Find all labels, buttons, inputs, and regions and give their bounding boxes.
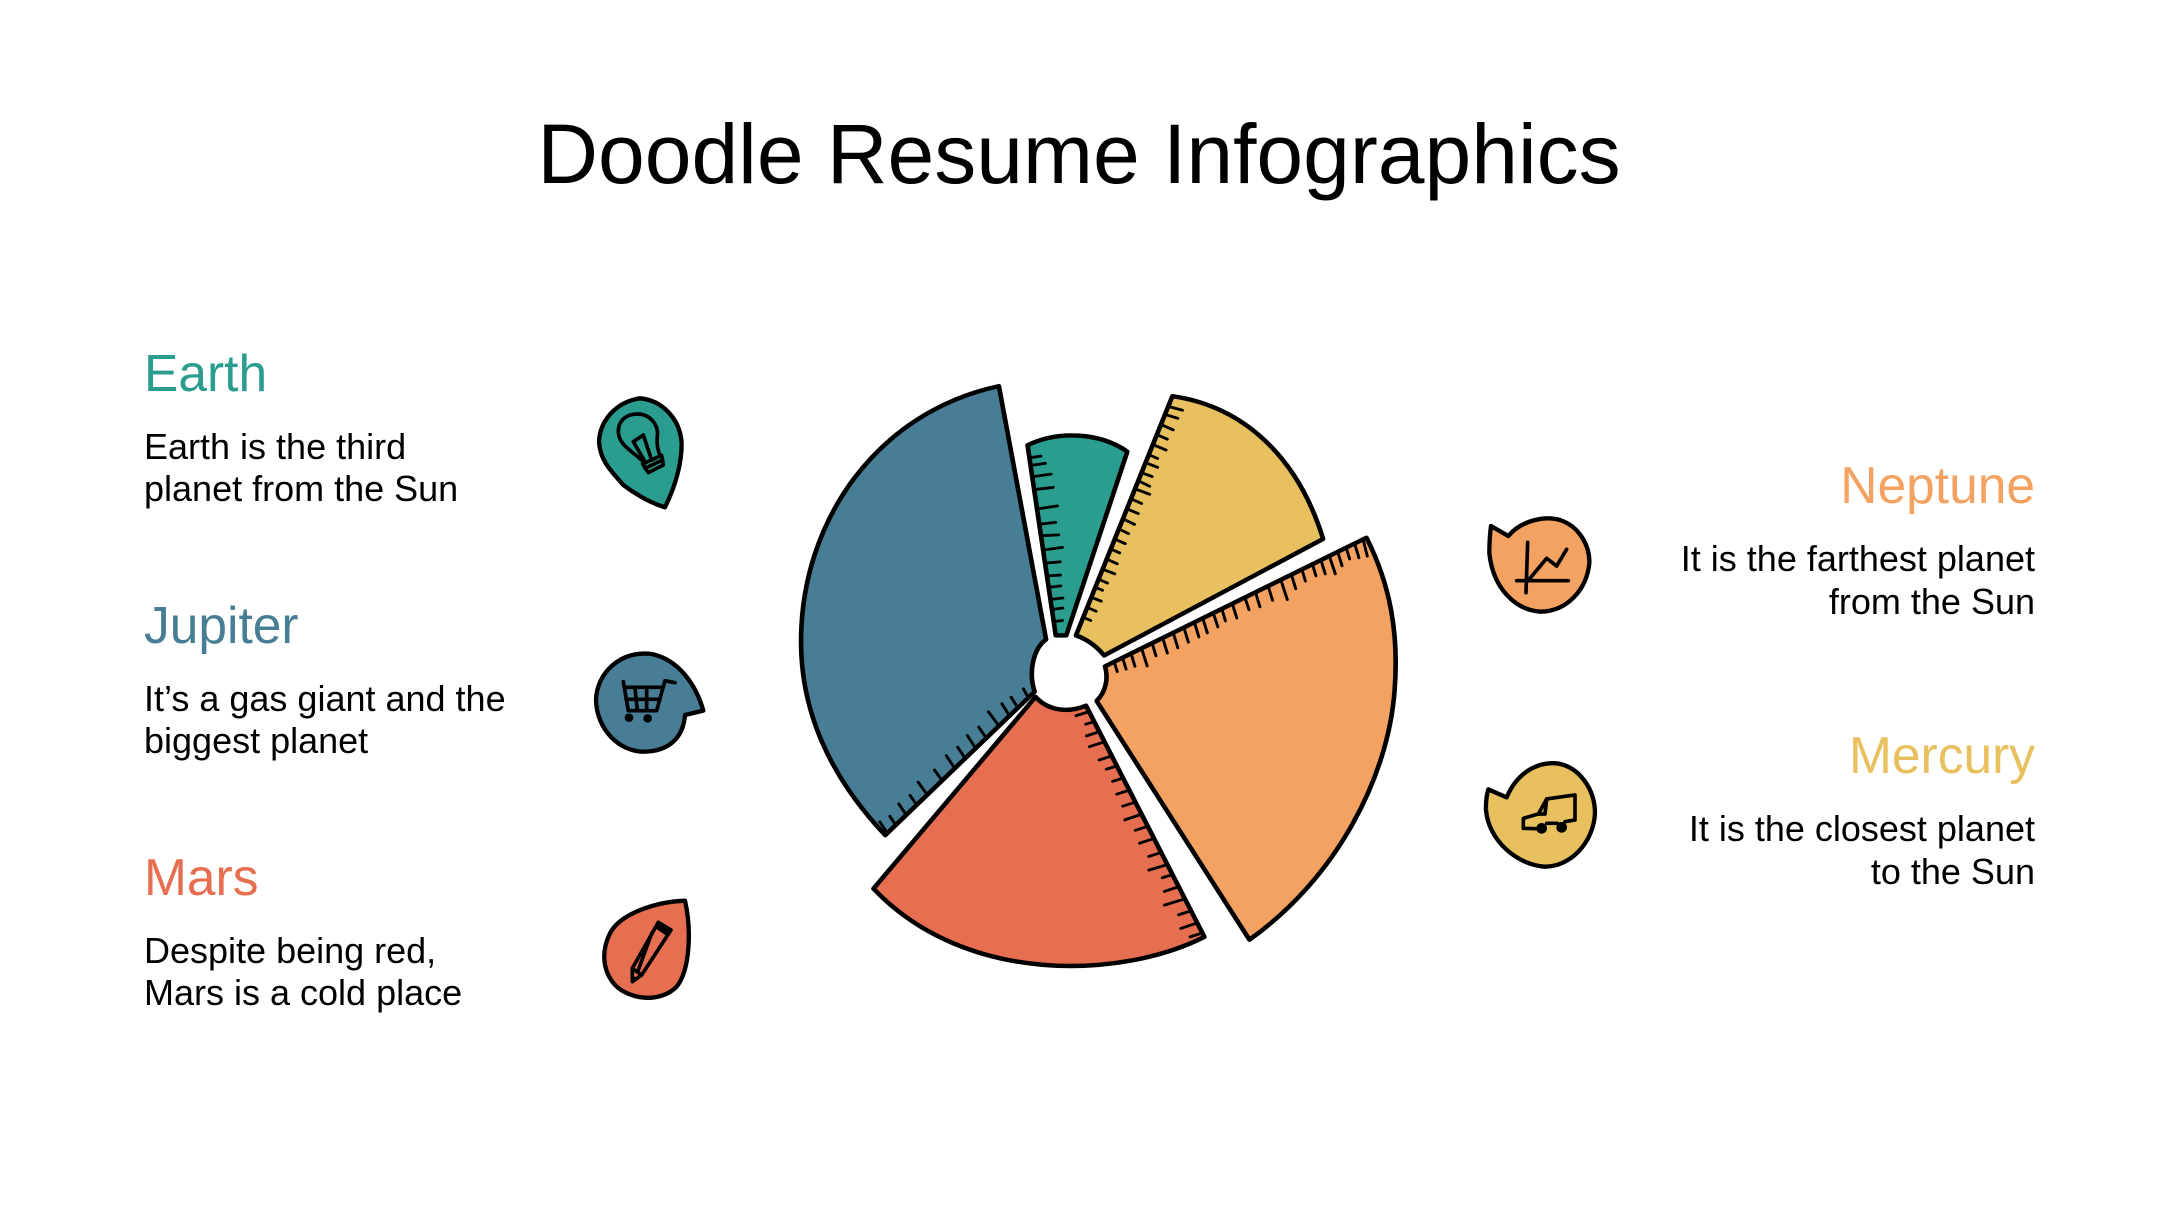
text block: Neptune: Neptune (1840, 456, 2035, 514)
slice: Neptune orange (1097, 538, 1396, 940)
text block: Neptune (1681, 456, 2035, 622)
text block: Mercury: to the Sun (1871, 851, 2035, 892)
text block: Jupiter: biggest planet (144, 720, 368, 761)
text block: Mars (144, 848, 462, 1013)
text block: Earth: planet from the Sun (144, 468, 458, 509)
title: Doodle Resume Infographics (537, 107, 1621, 201)
icon: shopping cart (596, 654, 703, 752)
text block: Earth: Earth is the third (144, 426, 406, 467)
text block: Mercury: It is the closest planet (1689, 808, 2035, 849)
text block: Mercury (1689, 726, 2035, 892)
icon: line chart (1489, 518, 1589, 612)
text block: Jupiter (144, 596, 506, 761)
icon: pencil (604, 901, 689, 998)
icon: car (1486, 763, 1595, 867)
slice: Earth teal (1028, 435, 1127, 635)
text block: Mars: Mars (144, 848, 258, 906)
text block: Earth: Earth (144, 344, 267, 402)
text block: Mars: Despite being red, (144, 930, 436, 971)
text block: Jupiter: Jupiter (144, 596, 299, 654)
text block: Mars: Mars is a cold place (144, 972, 462, 1013)
text block: Neptune: It is the farthest planet (1681, 538, 2035, 579)
slice: Mercury yellow (1076, 396, 1323, 655)
text block: Mercury: Mercury (1849, 726, 2035, 784)
pie chart (801, 386, 1396, 966)
text block: Neptune: from the Sun (1829, 581, 2035, 622)
text block: Jupiter: It’s a gas giant and the (144, 678, 506, 719)
slice: Mars red (873, 697, 1204, 966)
text block: Earth (144, 344, 458, 509)
slice: Jupiter blue (801, 386, 1046, 835)
icon: light bulb (599, 398, 682, 507)
